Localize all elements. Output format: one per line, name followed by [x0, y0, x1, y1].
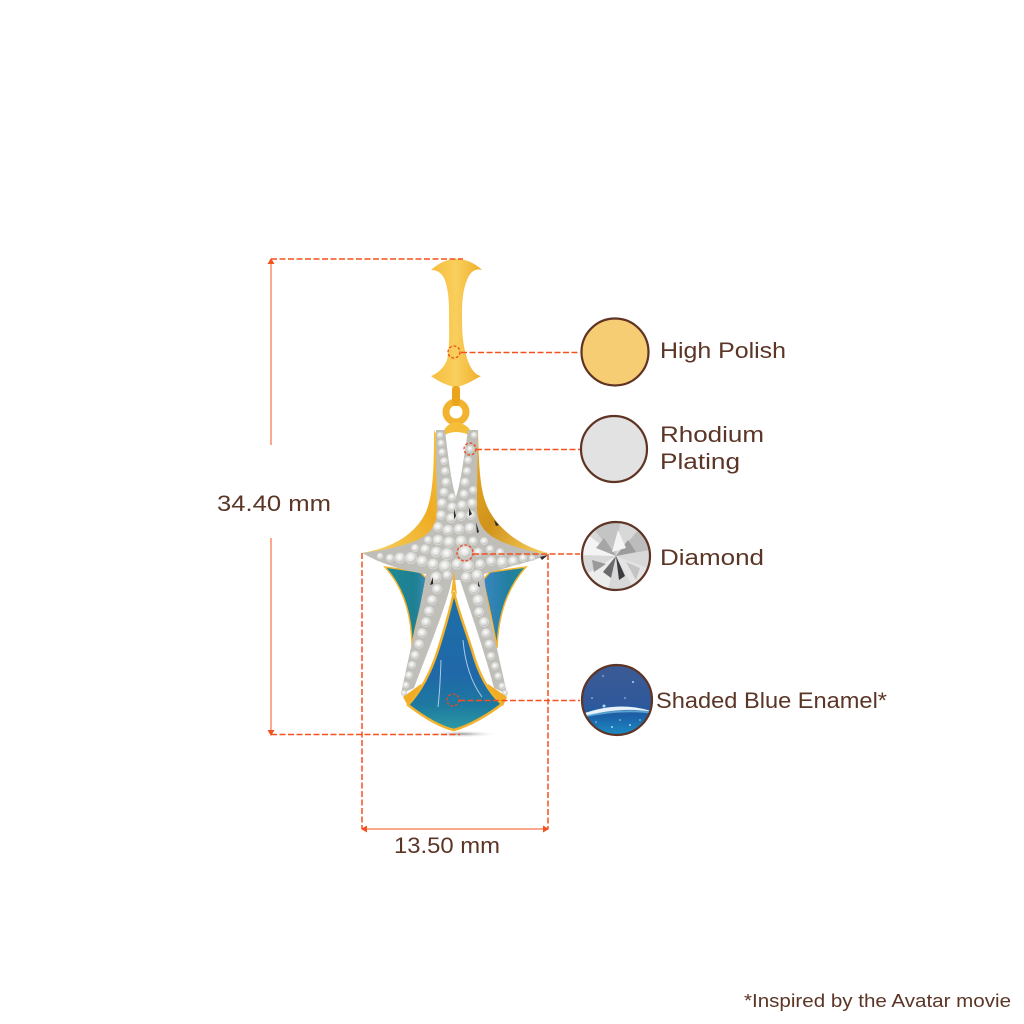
label: rhodium plating: Rhodium [660, 422, 764, 447]
pendant illustration [361, 259, 549, 738]
pendant shadow [426, 730, 498, 738]
enamel highlights [438, 640, 482, 707]
width dimension [361, 553, 549, 858]
footnote: *Inspired by the Avatar movie [744, 990, 1011, 1011]
side enamel left [385, 567, 428, 648]
diamonds [377, 432, 535, 696]
leader: high polish [448, 346, 580, 358]
height label: 34.40 mm [217, 491, 331, 516]
swatch: rhodium [581, 416, 647, 482]
leader: rhodium plating [464, 443, 580, 455]
connector link [442, 386, 473, 437]
material: diamond [582, 522, 764, 590]
swatch: high polish [582, 318, 648, 386]
width label: 13.50 mm [394, 833, 500, 858]
label: rhodium plating: Plating [660, 449, 740, 474]
leader: diamond [457, 545, 580, 561]
diamond setting [362, 430, 548, 694]
callout markers and leader lines [447, 346, 580, 706]
gold wing right [472, 430, 549, 553]
dark setting specks [430, 508, 548, 587]
swatch: diamond [582, 522, 652, 590]
side enamel right [483, 567, 526, 648]
material: shaded blue enamel [582, 665, 887, 735]
leader: blue enamel [447, 694, 580, 706]
gold wing left [361, 430, 440, 553]
swatch: blue enamel [582, 665, 654, 735]
label: diamond: Diamond [660, 545, 764, 570]
label: high polish: High Polish [660, 338, 786, 363]
centre blue enamel with gold rim [408, 592, 502, 730]
material: rhodium plating [581, 416, 764, 482]
gold bail [431, 259, 482, 387]
gold apex spike [451, 570, 457, 595]
height dimension [217, 258, 463, 736]
label: shaded blue enamel: Shaded Blue Enamel* [656, 688, 887, 713]
material: high polish [582, 318, 786, 386]
gold corner wedges [403, 684, 507, 706]
label: rhodium plating [660, 422, 764, 474]
